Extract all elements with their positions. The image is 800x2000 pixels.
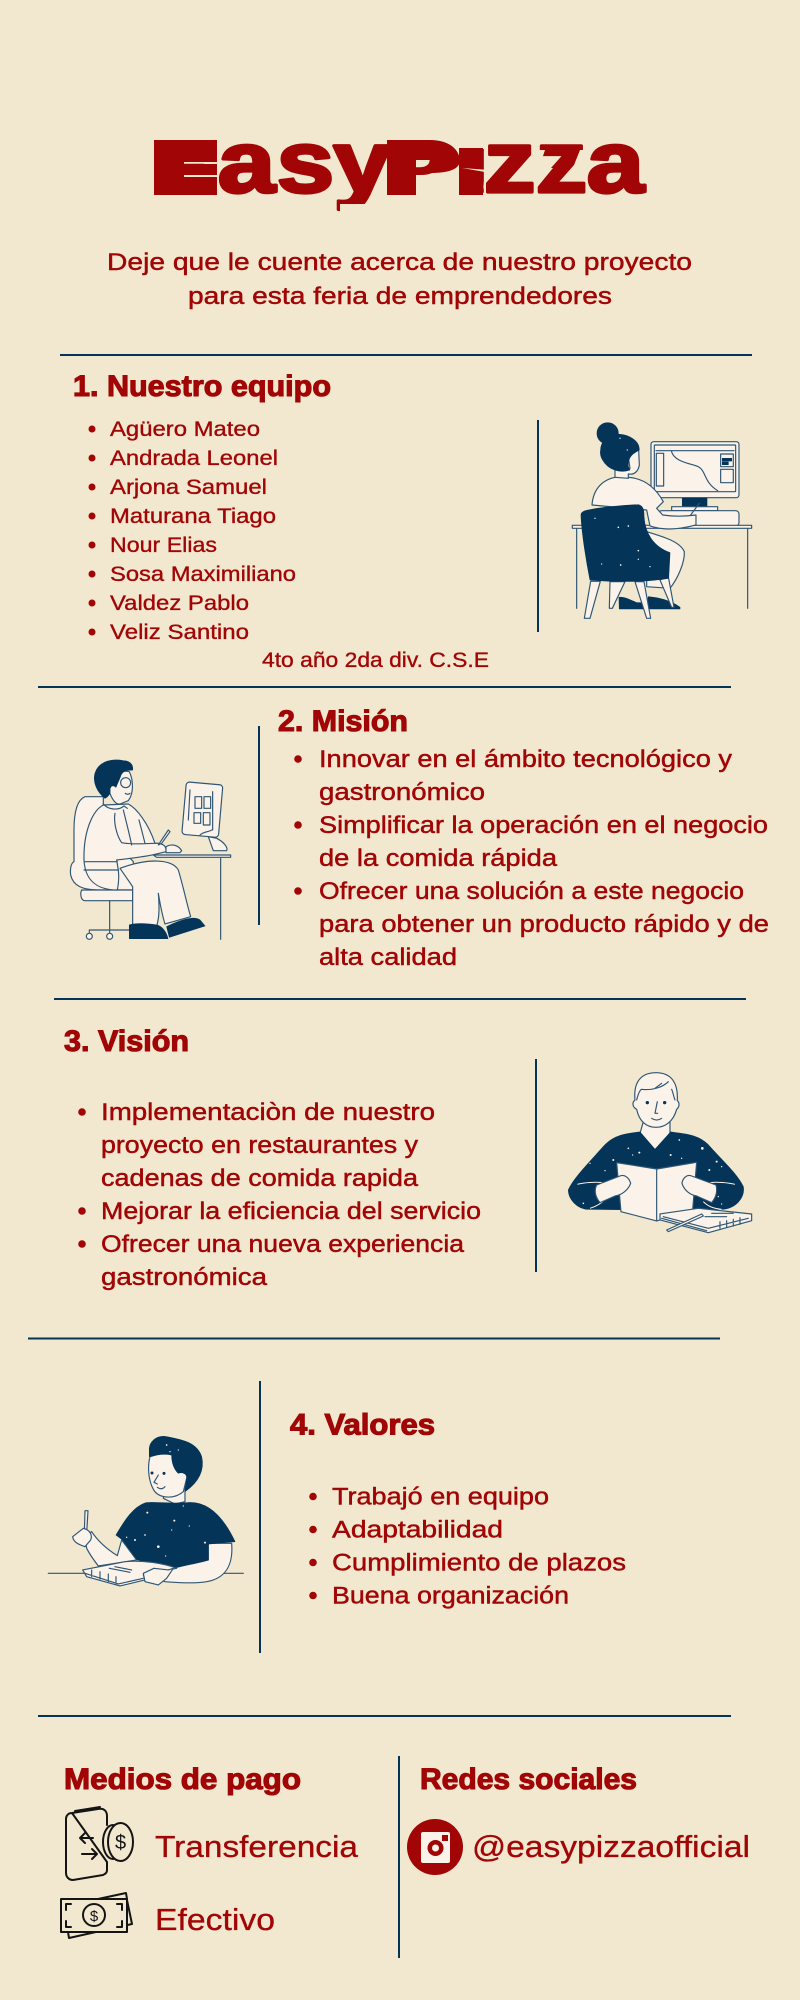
list: valores — [309, 1484, 626, 1610]
list: vision: proyecto en restaurantes y — [101, 1132, 418, 1159]
icon: phone transfer: $ — [115, 1832, 126, 1854]
text: instagram handle: @easypizzaofficial — [472, 1829, 750, 1864]
panel: nuestro equipo — [73, 370, 752, 672]
list: team members: Sosa Maximiliano — [110, 562, 296, 586]
list: vision: cadenas de comida rapida — [101, 1165, 419, 1192]
list: valores: Trabajó en equipo — [332, 1484, 549, 1510]
list: mision: Ofrecer una solución a este negocio — [319, 878, 744, 905]
list: mision: gastronómico — [319, 779, 485, 806]
list: valores: Buena organización — [332, 1582, 569, 1610]
label: efectivo: Efectivo — [155, 1902, 275, 1937]
title: E — [156, 129, 211, 207]
title: s — [277, 114, 334, 211]
icon: cash — [61, 1893, 132, 1938]
icon: man with glasses at desk — [70, 760, 231, 939]
list: team members: Andrada Leonel — [110, 446, 278, 470]
list: mision: de la comida rápida — [319, 845, 558, 872]
icon: woman at computer — [572, 423, 752, 618]
subtitle: para esta feria de emprendedores — [188, 283, 612, 310]
heading: nuestro equipo: 1. Nuestro equipo — [73, 370, 331, 403]
title: z — [536, 114, 587, 211]
list: valores: Cumplimiento de plazos — [332, 1550, 626, 1576]
list: team members: Veliz Santino — [110, 620, 249, 644]
heading: mision: 2. Misión — [278, 705, 408, 738]
subtitle: Deje que le cuente acerca de nuestro proyecto — [107, 249, 692, 276]
label: transferencia: Transferencia — [155, 1829, 359, 1864]
list: mision: alta calidad — [319, 944, 457, 971]
icon: cash: $ — [90, 1908, 99, 1925]
list: mision: Innovar en el ámbito tecnológico y — [319, 746, 732, 773]
title: z — [484, 114, 536, 211]
list: mision: para obtener un producto rápido y de — [319, 911, 769, 938]
heading: medios de pago: Medios de pago — [64, 1763, 301, 1796]
list: team members: Arjona Samuel — [110, 475, 267, 499]
list: team members: Maturana Tiago — [110, 504, 276, 528]
list: team members: Nour Elias — [110, 533, 217, 557]
title: a — [587, 114, 645, 211]
list: valores: Adaptabilidad — [332, 1516, 503, 1544]
panel: medios de pago — [61, 1763, 359, 1938]
title: i — [461, 114, 489, 211]
panel: mision — [70, 705, 769, 971]
list: mision — [294, 746, 769, 971]
list: team members: Valdez Pablo — [110, 591, 249, 615]
list: vision: gastronómica — [101, 1264, 268, 1291]
list: vision — [78, 1099, 481, 1291]
title — [154, 114, 645, 218]
title: P — [389, 129, 445, 207]
list: team members: Agüero Mateo — [110, 417, 260, 441]
heading: vision: 3. Visión — [64, 1025, 189, 1058]
list: mision: Simplificar la operación en el negocio — [319, 812, 768, 839]
icon: instagram — [407, 1819, 463, 1875]
list: vision: Implementaciòn de nuestro — [101, 1099, 435, 1126]
heading: redes sociales: Redes sociales — [420, 1763, 637, 1796]
icon: man writing — [48, 1436, 243, 1586]
list: team members — [88, 417, 296, 644]
text: course: 4to año 2da div. C.S.E — [262, 648, 489, 672]
panel: vision — [64, 1025, 752, 1291]
icon: phone transfer — [66, 1807, 133, 1880]
title: a — [218, 114, 276, 211]
list: vision: Mejorar la eficiencia del servicio — [101, 1198, 481, 1225]
list: vision: Ofrecer una nueva experiencia — [101, 1231, 465, 1258]
subtitle — [107, 249, 692, 310]
panel: valores — [48, 1381, 626, 1653]
title: y — [333, 114, 391, 211]
panel: redes sociales — [407, 1763, 750, 1875]
heading: valores: 4. Valores — [290, 1408, 435, 1442]
icon: man reading — [568, 1073, 752, 1233]
